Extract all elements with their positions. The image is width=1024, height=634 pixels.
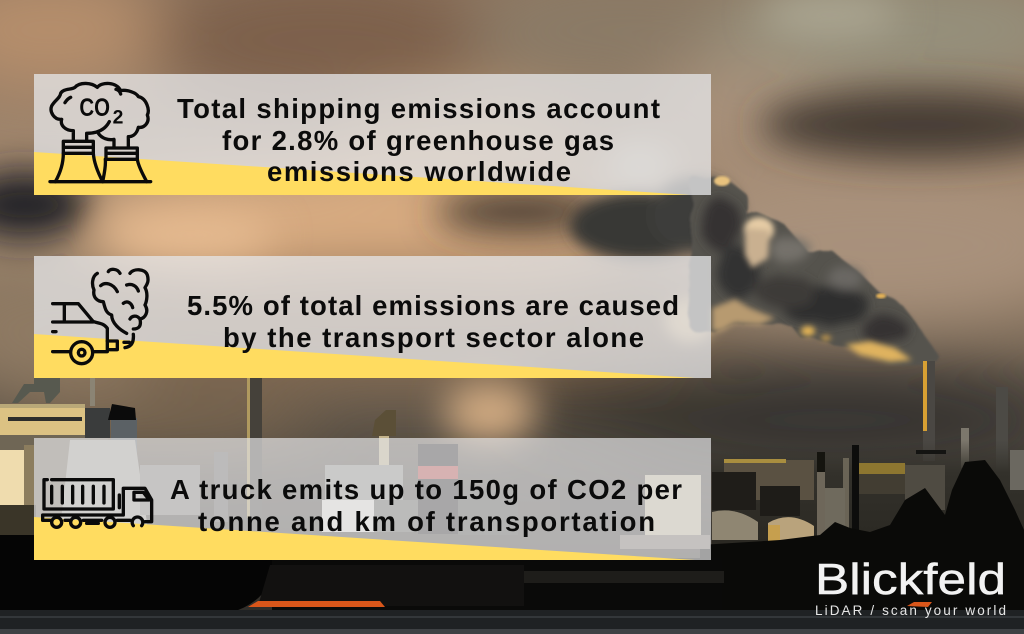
text: truck statistic: A truck emits up to 150g of CO2 per — [170, 474, 682, 505]
ship hull — [0, 535, 724, 612]
logo: Blickfeld — [815, 555, 1006, 618]
water — [0, 610, 1024, 634]
yellow wedge — [34, 152, 690, 195]
refinery silhouette — [700, 440, 1024, 610]
panel: transport sector — [34, 256, 711, 378]
logo: Blickfeld: Blickfeld — [815, 555, 1006, 604]
yellow wedge — [34, 334, 695, 378]
smoke plume — [570, 176, 933, 362]
yellow wedge — [34, 517, 695, 560]
icon: CO2 cooling towers: CO — [79, 95, 110, 122]
text: transport statistic: 5.5% of total emissions are caused — [187, 290, 679, 321]
text: shipping statistic: for 2.8% of greenhouse gas — [222, 125, 614, 156]
smokestacks — [923, 361, 1008, 472]
text: transport statistic: by the transport sector alone — [223, 322, 644, 353]
panel: truck emissions — [34, 438, 711, 560]
text: truck statistic: tonne and km of transportation — [198, 506, 655, 537]
icon: CO2 cooling towers: 2 — [113, 107, 123, 128]
logo: Blickfeld: LiDAR / scan your world — [815, 603, 1006, 618]
panel: shipping emissions — [34, 74, 711, 195]
ship midsection behind panel — [322, 410, 710, 549]
icon: car with exhaust smoke — [53, 269, 148, 364]
text: shipping statistic: emissions worldwide — [267, 156, 571, 187]
ship superstructure — [0, 378, 262, 538]
text: shipping statistic: Total shipping emissions account — [177, 93, 660, 124]
icon: CO2 cooling towers — [50, 83, 151, 182]
icon: container truck — [43, 480, 152, 527]
